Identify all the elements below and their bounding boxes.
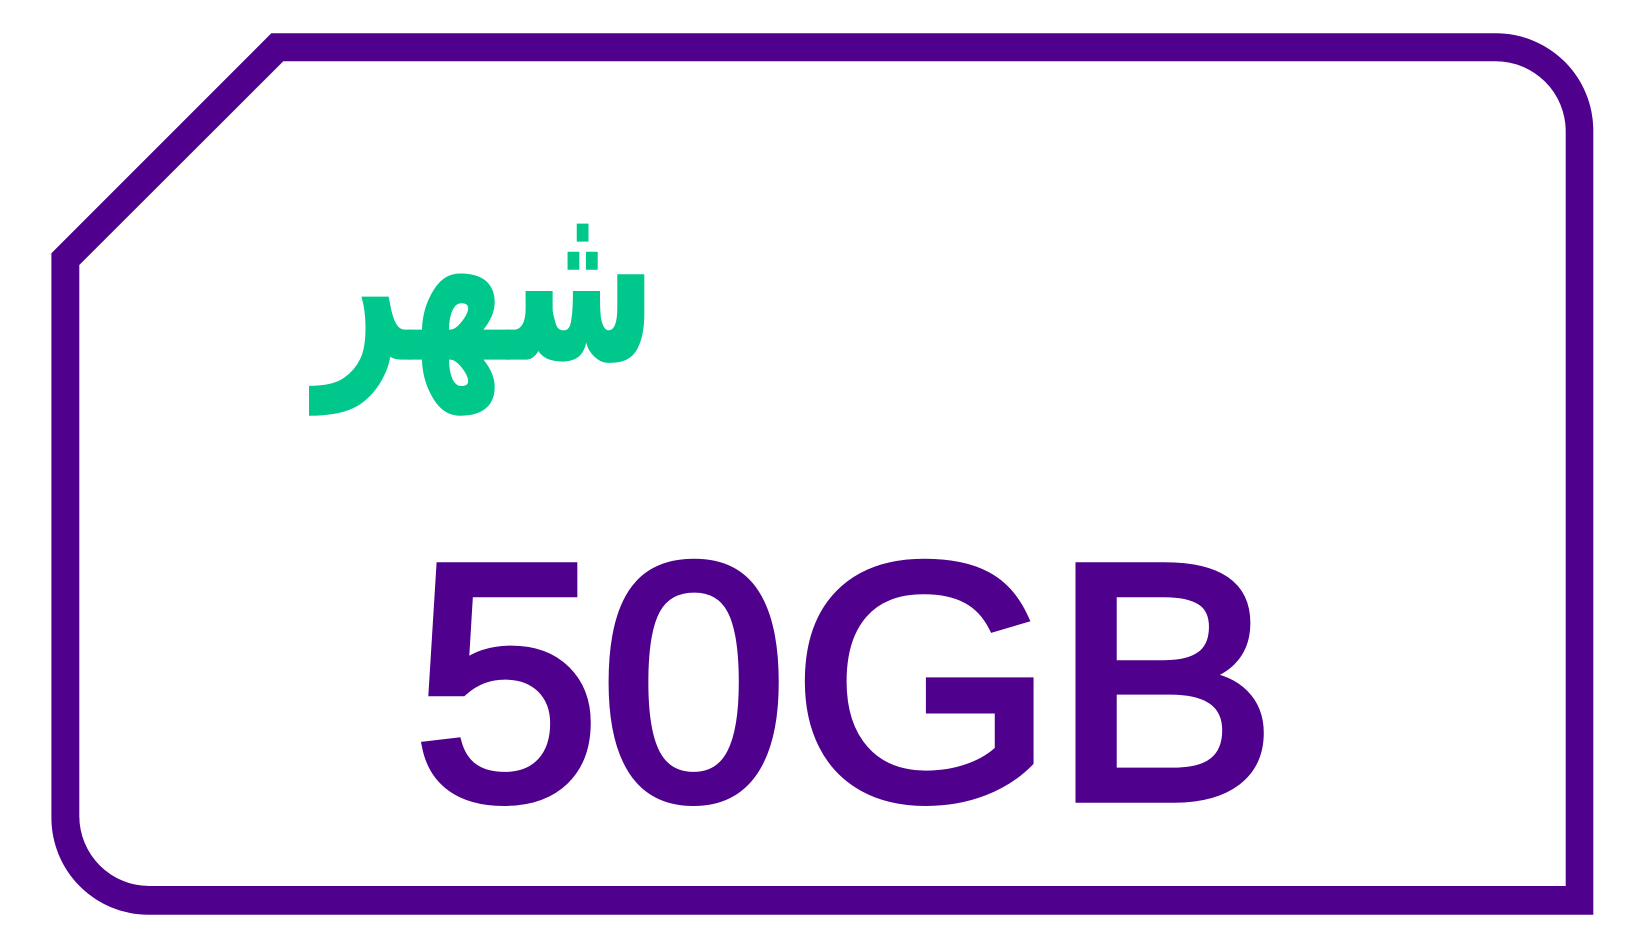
label: month in Arabic: شهر	[309, 146, 656, 416]
data amount: 50GB	[414, 495, 1276, 869]
